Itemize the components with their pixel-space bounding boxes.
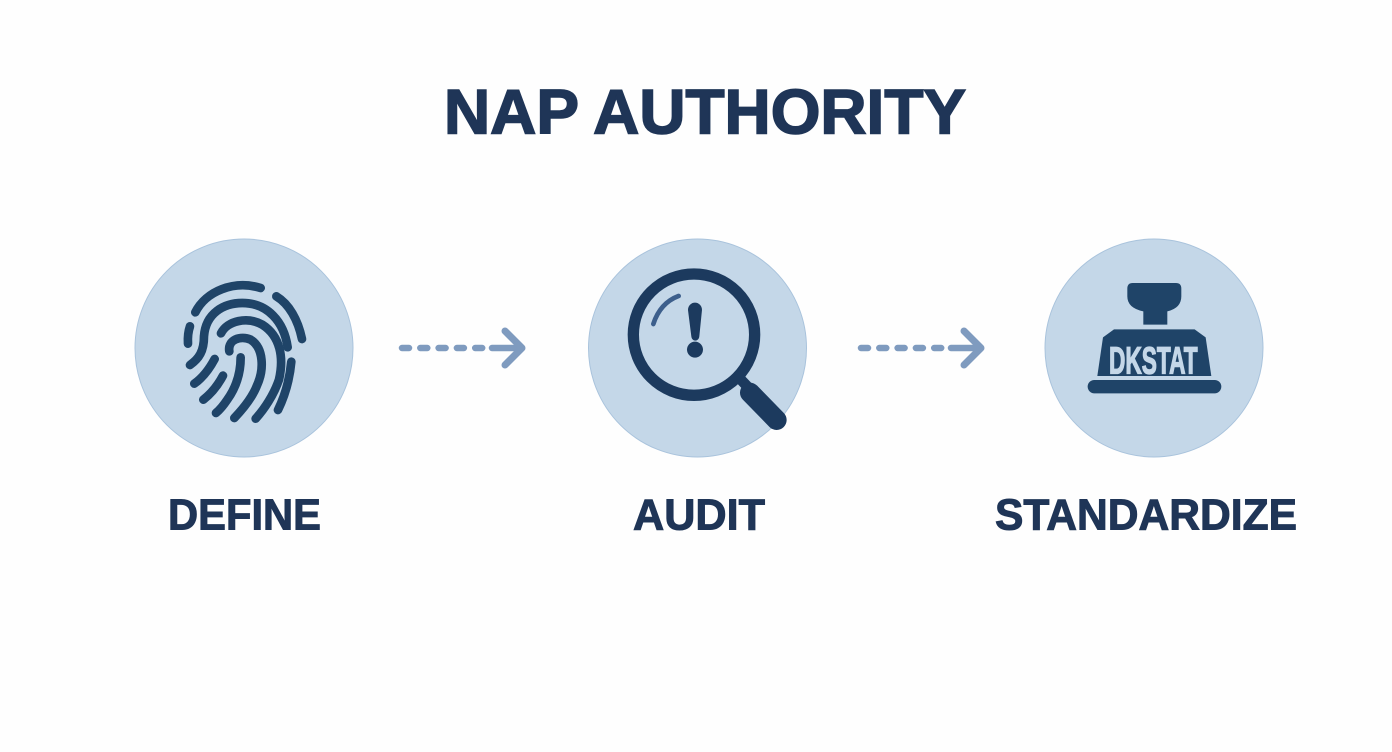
step 3 circle: standardize	[1045, 239, 1263, 457]
arrow: define to audit	[402, 331, 522, 365]
label: define: DEFINE	[168, 490, 321, 540]
label: audit: AUDIT	[633, 490, 765, 540]
step 1 circle: define	[135, 239, 353, 457]
arrow: audit to standardize	[861, 331, 981, 365]
title: NAP AUTHORITY	[444, 78, 966, 148]
icon: magnifying glass with exclamation mark	[633, 274, 777, 420]
step 2 circle: audit	[588, 239, 806, 457]
icon: fingerprint	[188, 285, 302, 419]
label: standardize: STANDARDIZE	[995, 490, 1297, 540]
icon: stamp	[1088, 283, 1221, 393]
icon: stamp: DKSTAT	[1109, 341, 1198, 383]
